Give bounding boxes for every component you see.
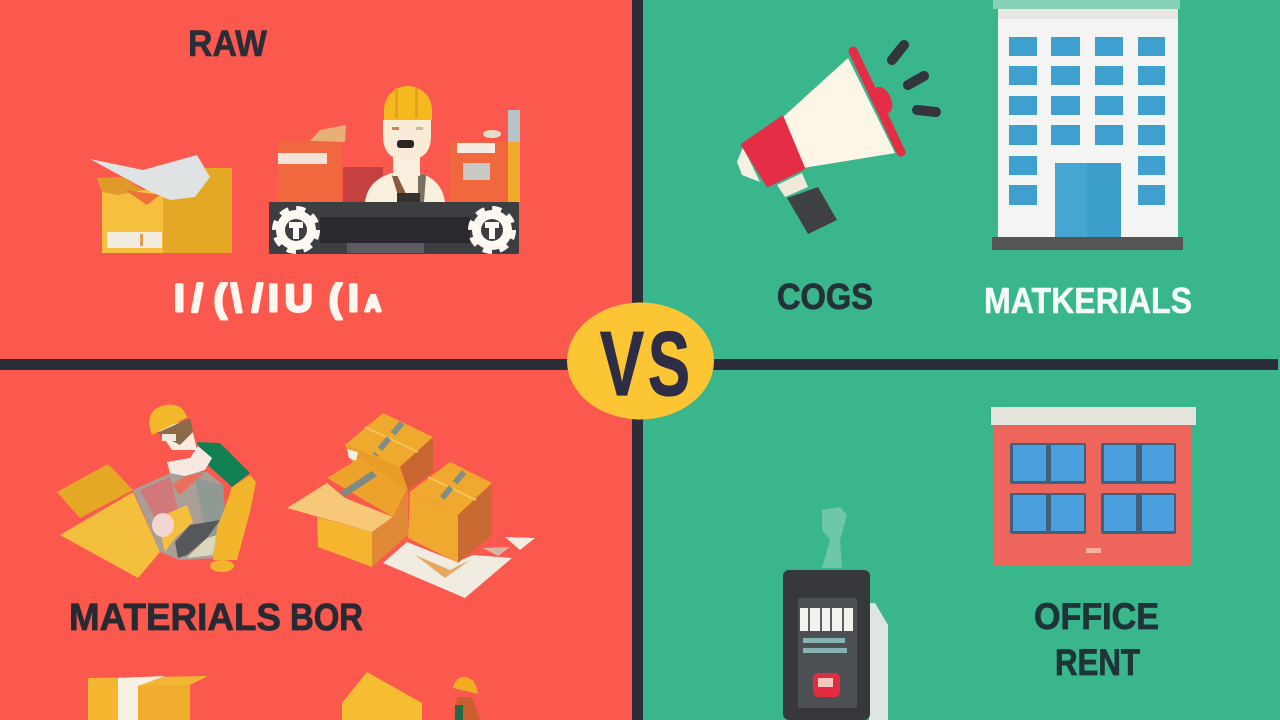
panel: bottom right green: [643, 370, 1280, 720]
icon: megaphone: [737, 45, 936, 234]
text: garbled white label: A: [365, 291, 381, 316]
label: OFFICE RENT: [1034, 596, 1159, 683]
icon: worker at conveyor belt: [269, 86, 520, 254]
panel: top left red: [0, 0, 633, 359]
label: MATERIALS BOR: BOR: [290, 597, 363, 639]
icon: bottom box with worker: [342, 672, 480, 720]
heading: RAW: RAW: [188, 23, 267, 64]
badge: VS: V: [600, 314, 644, 415]
label: OFFICE RENT: RENT: [1055, 642, 1140, 683]
badge: VS: [567, 302, 714, 420]
icon: office tower: [992, 0, 1183, 250]
icon: bottom box: [88, 676, 208, 720]
label: COGS: COGS: [777, 276, 873, 317]
panel: top right green: [643, 0, 1280, 359]
label: OFFICE RENT: OFFICE: [1034, 596, 1159, 637]
panel: bottom left red: [0, 370, 633, 720]
icon: smartphone terminal: [783, 507, 888, 720]
badge: VS: S: [648, 314, 690, 415]
icon: worker packing box: [57, 405, 256, 578]
icon: red office building: [991, 407, 1196, 566]
label: MATERIALS BOR: MATERIALS: [69, 597, 281, 639]
icon: open cardboard box: [90, 155, 232, 253]
text: garbled white label: I/(\/IU(I: [174, 278, 359, 320]
icon: stacked boxes: [287, 413, 535, 598]
label: MATKERIALS: MATKERIALS: [984, 280, 1192, 321]
